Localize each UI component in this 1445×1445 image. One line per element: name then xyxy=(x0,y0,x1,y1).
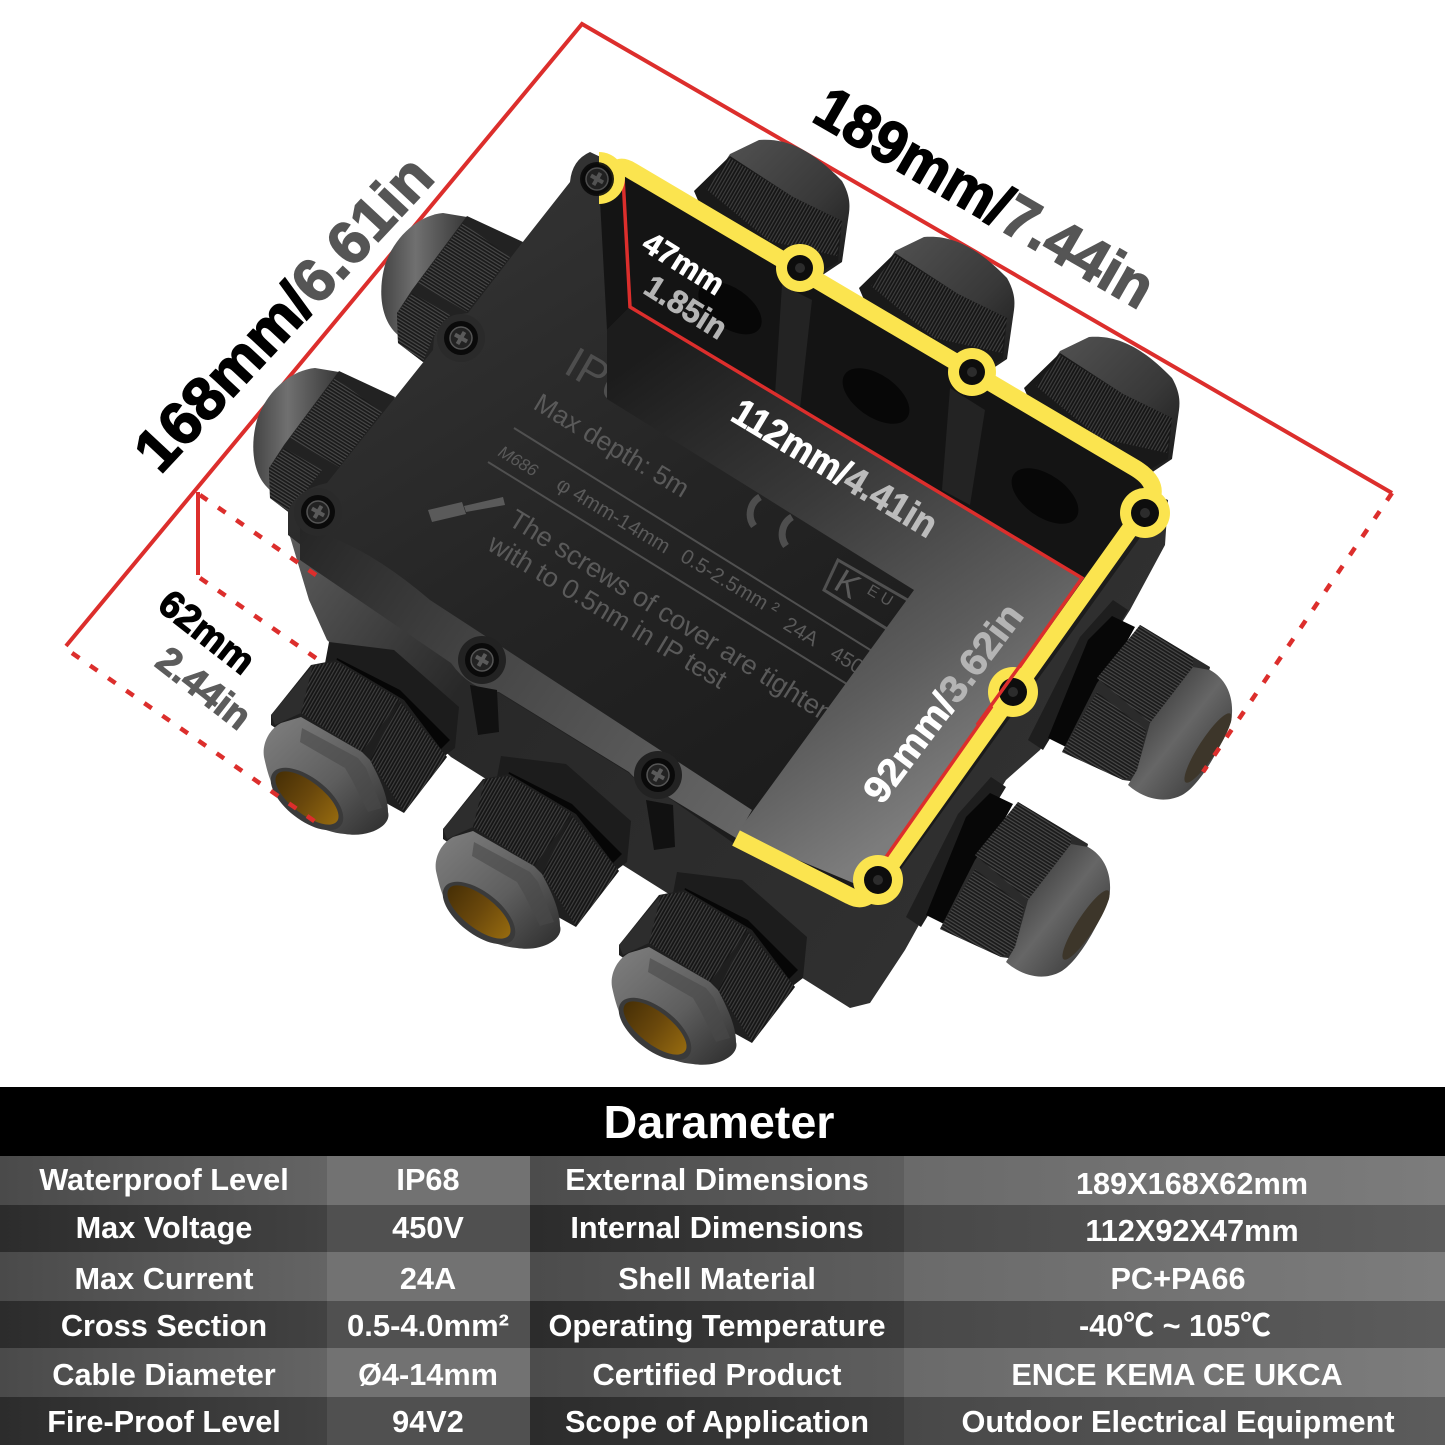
parameter table text: column 4 values: -40℃ ~ 105℃ xyxy=(1079,1308,1271,1343)
parameter table text: column 3 labels: Operating Temperature xyxy=(548,1308,886,1343)
parameter table text: column 4 values: ENCE KEMA CE UKCA xyxy=(1011,1357,1343,1392)
yellow sealing groove xyxy=(606,167,1153,899)
screw tab ribs on front wall xyxy=(470,685,675,850)
parameter table text: column 2 values: 24A xyxy=(400,1261,456,1296)
parameter table text: column 2 values xyxy=(347,1162,509,1439)
parameter table text: column 2 values: 94V2 xyxy=(392,1404,464,1439)
parameter table text: column 1 labels: Fire-Proof Level xyxy=(47,1404,281,1439)
corner screw at top xyxy=(580,152,625,204)
interior red dimension lines xyxy=(623,177,1082,887)
CE mark xyxy=(750,497,792,546)
parameter table text: column 1 labels: Waterproof Level xyxy=(39,1162,289,1197)
printed text on the cover: φ 4mm-14mm xyxy=(552,473,674,558)
screw rings on yellow groove xyxy=(776,244,1170,905)
KEMA logo box: K xyxy=(828,562,867,607)
parameter table text: column 1 labels: Max Voltage xyxy=(76,1210,252,1245)
icon: screwdriver xyxy=(428,497,505,522)
cable glands behind the box: top xyxy=(694,140,1179,487)
translucent gray cut-away overlay xyxy=(607,307,1082,890)
parameter table title bar: Darameter xyxy=(604,1096,834,1148)
parameter table title bar xyxy=(0,1087,1445,1156)
interior cable holes xyxy=(689,271,1088,535)
parameter table text: column 4 values: 112X92X47mm xyxy=(1085,1213,1299,1248)
dimension label: 1.85in: 1.85in xyxy=(638,268,734,346)
printed text on the cover xyxy=(482,338,880,745)
parameter table text: column 3 labels: Shell Material xyxy=(618,1261,816,1296)
junction box cover xyxy=(288,152,1160,905)
KEMA logo box xyxy=(824,560,925,640)
parameter table cells xyxy=(0,1156,1445,1445)
front bevel band xyxy=(300,528,752,838)
parameter table text: column 2 values: 450V xyxy=(392,1210,464,1245)
dimension label: 62mm: 62mm xyxy=(150,582,263,683)
cable glands behind the box: left xyxy=(253,213,523,517)
printed text on the cover: IP68 xyxy=(557,338,660,426)
interior ribs xyxy=(775,285,985,505)
parameter table text: column 4 values: PC+PA66 xyxy=(1110,1261,1246,1296)
KEMA logo box: E U xyxy=(864,582,896,610)
parameter table text: column 2 values: IP68 xyxy=(396,1162,460,1197)
parameter table text: column 1 labels xyxy=(39,1162,289,1439)
parameter table text: column 3 labels: Internal Dimensions xyxy=(570,1210,864,1245)
printed text on the cover: 0.5-2.5mm ² xyxy=(676,545,783,621)
printed separator lines xyxy=(488,428,880,686)
dimension label: 92mm/3.62in: 92mm/3.62in xyxy=(855,596,1032,811)
parameter table text: column 2 values: 0.5-4.0mm² xyxy=(347,1308,509,1343)
printed text on the cover: 24A xyxy=(779,613,823,651)
dimension label: 189mm/7.44in: 189mm/7.44in xyxy=(803,73,1166,321)
cable glands on the right xyxy=(906,600,1238,977)
parameter table text: column 1 labels: Max Current xyxy=(74,1261,254,1296)
printed text on the cover: Max depth: 5m xyxy=(529,387,695,503)
interior cavity xyxy=(600,177,1150,578)
printed text on the cover: with to 0.5nm in IP test xyxy=(482,528,732,695)
junction box body wall xyxy=(288,300,1168,1008)
parameter table text: column 3 labels: Scope of Application xyxy=(565,1404,869,1439)
dimension label: 168mm/6.61in: 168mm/6.61in xyxy=(121,142,446,484)
parameter table text: column 2 values: Ø4-14mm xyxy=(358,1357,498,1392)
parameter table text: column 4 values: Outdoor Electrical Equipment xyxy=(961,1404,1395,1439)
parameter table text: column 3 labels xyxy=(548,1162,886,1439)
printed text on the cover: M686 xyxy=(495,442,542,481)
parameter table text: column 4 values xyxy=(961,1166,1395,1439)
dimension label: 2.44in: 2.44in xyxy=(148,639,259,739)
dashed dimension lines xyxy=(72,493,1392,825)
cable glands in front xyxy=(260,642,807,1072)
printed text on the cover: 450V xyxy=(826,642,880,686)
parameter table text: column 4 values: 189X168X62mm xyxy=(1076,1166,1308,1201)
cover screws xyxy=(294,314,682,799)
parameter table text: column 3 labels: External Dimensions xyxy=(565,1162,869,1197)
printed text on the cover: The screws of cover are tightened xyxy=(504,504,865,745)
outer dimension lines xyxy=(66,24,1392,646)
dimension label: 112mm/4.41in: 112mm/4.41in xyxy=(724,391,945,547)
dimension label: 47mm: 47mm xyxy=(636,225,731,302)
parameter table text: column 1 labels: Cable Diameter xyxy=(52,1357,276,1392)
parameter table text: column 3 labels: Certified Product xyxy=(593,1357,841,1392)
parameter table text: column 1 labels: Cross Section xyxy=(61,1308,267,1343)
